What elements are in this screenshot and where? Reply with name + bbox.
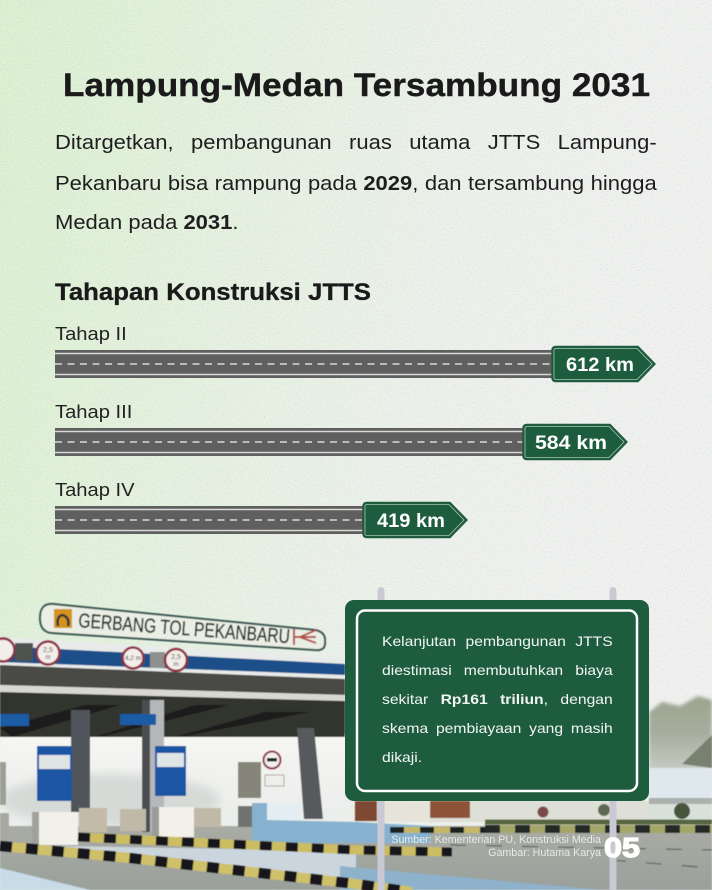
label: Tahap III: Tahap III <box>55 402 132 422</box>
bar: Tahap II 612 km: 612 km <box>566 354 634 376</box>
intro paragraph: Pekanbaru bisa rampung pada 2029, dan tersambung hingga <box>55 173 657 195</box>
height limit signs: 2,5 <box>171 654 181 661</box>
toll booths <box>79 808 107 832</box>
callout text: Kelanjutan pembangunan JTTS <box>382 633 613 649</box>
callout text: sekitar Rp161 triliun, dengan <box>382 691 613 707</box>
gate name sign <box>40 604 325 650</box>
height limit signs: m <box>174 662 178 668</box>
light blue barrier <box>252 803 300 820</box>
ground <box>0 826 712 890</box>
bar: Tahap III 584 km <box>55 424 627 460</box>
source credit: Sumber: Kementerian PU, Konstruksi Media <box>391 834 601 846</box>
backdrop behind gate <box>0 734 350 834</box>
source credit <box>391 834 601 859</box>
height limit signs <box>0 638 187 671</box>
bar: Tahap IV 419 km <box>55 502 467 538</box>
page number: 05 <box>604 832 640 863</box>
height limit signs: 4,2 m <box>125 655 141 662</box>
title: Lampung-Medan Tersambung 2031 <box>63 67 650 103</box>
intro paragraph: Medan pada 2031. <box>55 212 239 234</box>
source credit: Gambar: Hutama Karya <box>488 847 601 859</box>
canopy fascia <box>0 637 345 680</box>
right side trees and roof <box>355 696 712 822</box>
label: Tahap II: Tahap II <box>55 324 127 344</box>
label: Tahap IV: Tahap IV <box>55 480 135 500</box>
lane traffic sign <box>264 752 284 786</box>
columns <box>71 710 90 812</box>
height limit signs: m <box>46 655 50 661</box>
section heading: Tahapan Konstruksi JTTS <box>55 279 371 306</box>
canopy ceiling <box>0 688 345 737</box>
bar: Tahap II 612 km <box>55 346 655 382</box>
photo: Pekanbaru toll gate <box>0 602 712 890</box>
road bars and km signs <box>55 346 656 538</box>
bar: Tahap IV 419 km: 419 km <box>377 510 445 532</box>
sign poles <box>345 587 649 890</box>
bar: Tahap III 584 km: 584 km <box>535 432 607 454</box>
road sign callout <box>345 587 649 890</box>
black and yellow curbs <box>0 822 712 890</box>
blue information boards <box>37 746 72 801</box>
gate name sign: GERBANG TOL PEKANBARU <box>78 610 291 648</box>
callout text: diestimasi membutuhkan biaya <box>382 662 613 678</box>
callout text: dikaji. <box>382 749 422 765</box>
intro paragraph: Ditargetkan, pembangunan ruas utama JTTS Lampung- <box>55 132 657 154</box>
callout text: skema pembiayaan yang masih <box>382 720 613 736</box>
intro paragraph <box>55 132 657 234</box>
height limit signs: 2,5 <box>43 647 53 654</box>
chart: construction stages <box>55 324 656 538</box>
